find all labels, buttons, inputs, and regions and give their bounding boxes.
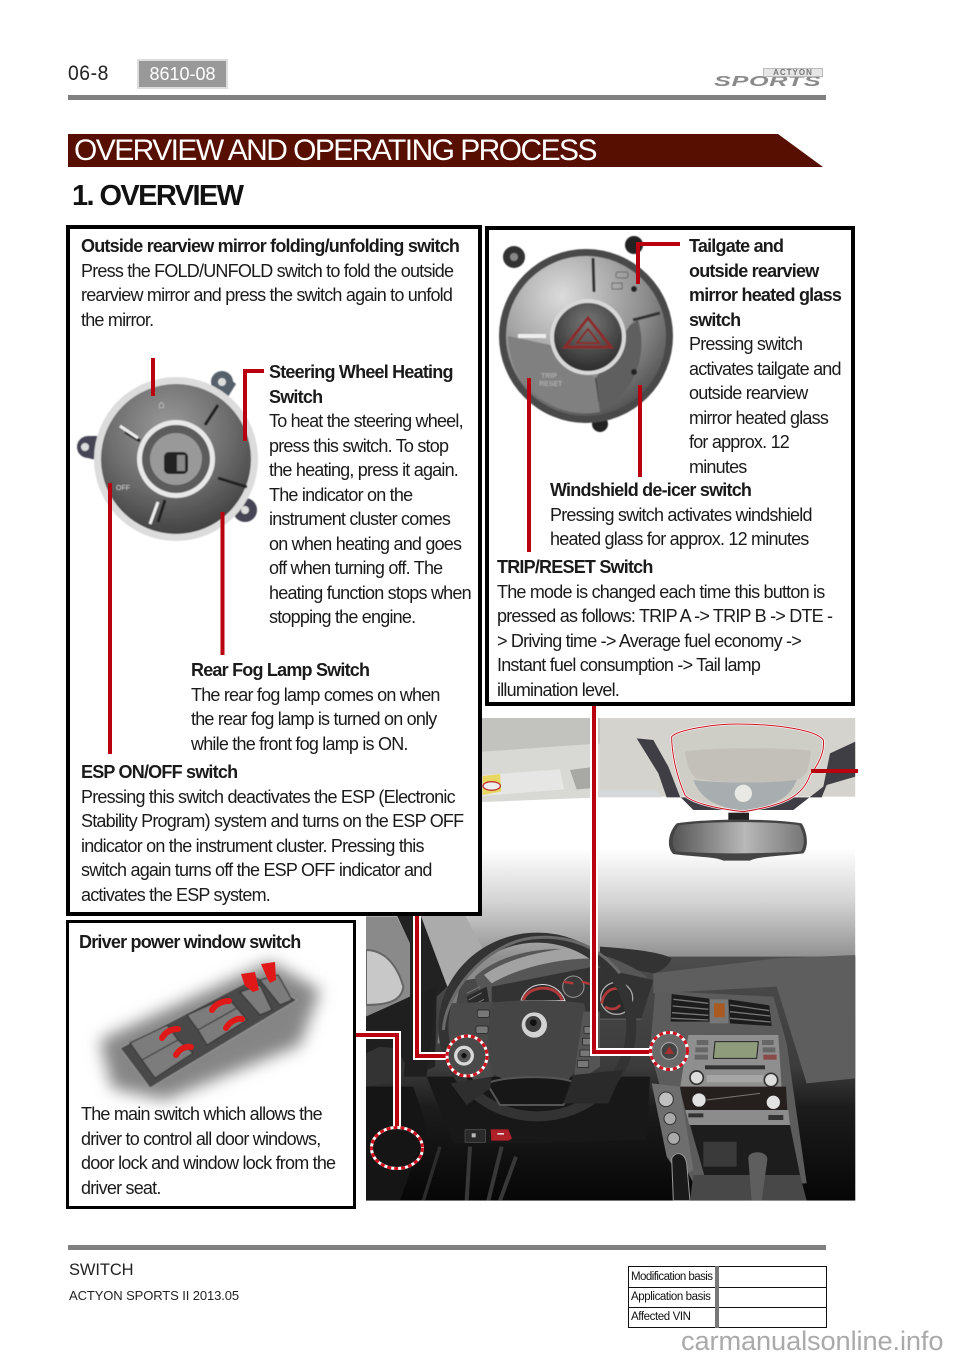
footer: model and date: ACTYON SPORTS II 2013.05 [69, 1288, 239, 1303]
text: ESP switch: indicator on the instrument cluster. Pressing this [81, 836, 424, 856]
text: tailgate heated glass switch: switch [689, 310, 740, 330]
text: trip reset switch: The mode is changed each time this button is [497, 582, 824, 602]
heading: 1. Overview: 1. OVERVIEW [72, 180, 242, 212]
text: windshield de-icer switch: Windshield de-icer switch [550, 480, 751, 500]
text: trip reset switch [497, 557, 832, 700]
text: trip reset switch: > Driving time -> Average fuel economy -> [497, 630, 801, 650]
text: mirror folding switch: Outside rearview mirror folding/unfolding switch [81, 236, 459, 256]
panel: driver power window switch [66, 920, 356, 1209]
text: window switch description: driver seat. [81, 1178, 161, 1198]
footer: section name: SWITCH [69, 1261, 133, 1279]
connector: overhead lamp [811, 769, 858, 773]
text: windshield de-icer switch [550, 480, 812, 549]
section code badge [137, 59, 228, 89]
header rule [68, 95, 826, 100]
text: steering wheel heating switch: the heating, press it again. [269, 460, 458, 480]
text: tailgate heated glass switch: for approx. 12 [689, 432, 789, 452]
connector: hazard panel switches [594, 704, 650, 1052]
text: tailgate heated glass switch: activates tailgate and [689, 358, 841, 378]
watermark: carmanualsonline.info [681, 1325, 943, 1356]
callout circle: window switch [372, 1128, 422, 1168]
section banner: OVERVIEW AND OPERATING PROCESS [74, 134, 596, 167]
text: tailgate heated glass switch: outside rearview [689, 383, 807, 403]
text: steering wheel heating switch: heating function stops when [269, 582, 471, 602]
text: steering wheel heating switch: off when turning off. The [269, 558, 442, 578]
text: steering wheel heating switch: Steering Wheel Heating [269, 362, 453, 382]
callout circle: hazard switch [650, 1032, 688, 1070]
text: tailgate heated glass switch: minutes [689, 456, 746, 476]
table: modification info [628, 1266, 827, 1328]
text: window switch description: driver to control all door windows, [81, 1128, 320, 1148]
connector: driver window switch [352, 1035, 397, 1127]
icon: mirror and heating switch unit: ⌂ [158, 399, 165, 411]
icon: hazard switch unit [499, 236, 673, 432]
text: mirror folding switch [81, 236, 459, 330]
text: tailgate heated glass switch [689, 236, 842, 476]
text: ESP switch: Pressing this switch deactivates the ESP (Electronic [81, 786, 455, 806]
icon: driver window switch photo [100, 962, 320, 1100]
text: trip reset switch: pressed as follows: TRIP A -> TRIP B -> DTE - [497, 606, 832, 626]
text: tailgate heated glass switch: outside rearview [689, 260, 818, 280]
text: window switch description [81, 1104, 336, 1198]
text: ESP switch: activates the ESP system. [81, 884, 270, 904]
text: tailgate heated glass switch: mirror heated glass [689, 285, 841, 305]
text: trip reset switch: illumination level. [497, 680, 619, 700]
text: windshield de-icer switch: Pressing switch activates windshield [550, 504, 812, 524]
connector: mirror folding switch [417, 912, 447, 1056]
text: mirror folding switch: rearview mirror and press the switch again to unfold [81, 285, 452, 305]
text: mirror folding switch: the mirror. [81, 310, 153, 330]
section banner [68, 134, 823, 167]
text: steering wheel heating switch: stopping the engine. [269, 607, 415, 627]
icon: hazard switch unit: RESET [539, 381, 563, 388]
page number: 06-8 [68, 62, 109, 85]
panel: hazard switch group [485, 226, 855, 706]
text: windshield de-icer switch: heated glass for approx. 12 minutes [550, 529, 809, 549]
text: steering wheel heating switch: To heat the steering wheel, [269, 411, 463, 431]
icon: mirror and heating switch unit [77, 371, 258, 541]
text: rear fog lamp switch: the rear fog lamp is turned on only [191, 709, 437, 729]
text: mirror folding switch: Press the FOLD/UNFOLD switch to fold the outside [81, 260, 453, 280]
text: steering wheel heating switch: press this switch. To stop [269, 436, 448, 456]
leader lines: hazard unit [529, 244, 680, 552]
text: rear fog lamp switch [191, 660, 440, 754]
panel: mirror and steering switches [66, 225, 482, 916]
callout circle: steering wheel switch [447, 1036, 487, 1076]
text: ESP switch: ESP ON/OFF switch [81, 762, 237, 782]
text: rear fog lamp switch: while the front fog lamp is ON. [191, 734, 408, 754]
text: trip reset switch: TRIP/RESET Switch [497, 557, 653, 577]
text: steering wheel heating switch: on when heating and goes [269, 534, 461, 554]
text: steering wheel heating switch: instrument cluster comes [269, 509, 450, 529]
text: ESP switch [81, 762, 464, 905]
text: tailgate heated glass switch: Pressing switch [689, 334, 802, 354]
text: ESP switch: Stability Program) system and turns on the ESP OFF [81, 811, 463, 831]
text: rear fog lamp switch: Rear Fog Lamp Switch [191, 660, 369, 680]
text: steering wheel heating switch [269, 362, 471, 627]
icon: mirror and heating switch unit: OFF [116, 485, 130, 492]
table: modification info: Application basis [631, 1291, 711, 1303]
text: tailgate heated glass switch: mirror heated glass [689, 408, 828, 428]
icon: hazard switch unit: TRIP [541, 373, 557, 380]
text: window switch description: door lock and window lock from the [81, 1153, 335, 1173]
section code badge: 8610-08 [149, 64, 216, 84]
text: steering wheel heating switch: The indicator on the [269, 484, 412, 504]
text: ESP switch: switch again turns off the ESP OFF indicator and [81, 860, 432, 880]
footer rule [68, 1245, 826, 1250]
text: rear fog lamp switch: The rear fog lamp comes on when [191, 684, 440, 704]
logo: Actyon Sports: SPORTS [714, 73, 821, 90]
text: trip reset switch: Instant fuel consumption -> Tail lamp [497, 655, 760, 675]
text: steering wheel heating switch: Switch [269, 386, 322, 406]
heading: driver window switch: Driver power window switch [79, 932, 301, 952]
text: tailgate heated glass switch: Tailgate and [689, 236, 783, 256]
text: window switch description: The main switch which allows the [81, 1104, 322, 1124]
table: modification info: Modification basis [631, 1271, 713, 1283]
vehicle interior photo [356, 706, 858, 1201]
logo: Actyon Sports: ACTYON [773, 68, 813, 77]
table: modification info: Affected VIN [631, 1311, 691, 1323]
leader lines: mirror unit [110, 358, 264, 754]
